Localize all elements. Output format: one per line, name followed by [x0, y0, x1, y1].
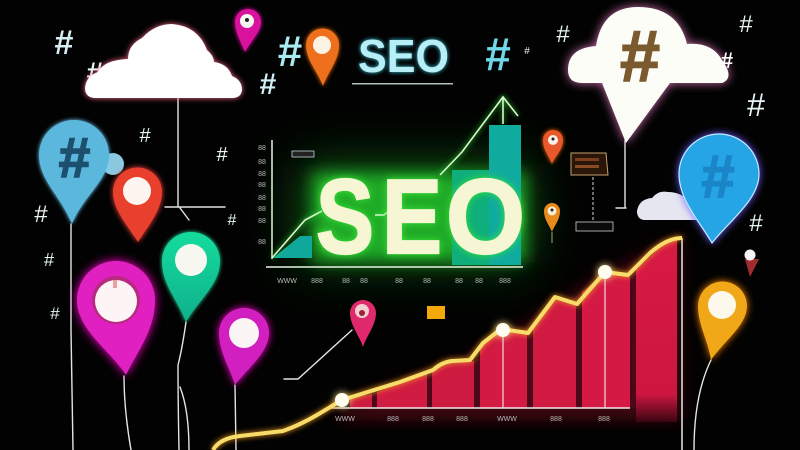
y-axis tick labels: 88 [258, 206, 266, 213]
bar labels [335, 416, 610, 423]
chart baseline and right axis [328, 238, 682, 450]
chart glow [300, 165, 528, 263]
x-axis labels: 88 [395, 278, 403, 285]
pin: large magenta [77, 261, 155, 375]
pin: blue right with hashtag: # [701, 143, 735, 210]
hashtag cluster: left and top: # [216, 144, 228, 166]
y-axis tick labels: 88 [258, 145, 266, 152]
connector strings [71, 98, 711, 450]
hashtag cluster: left and top: # [278, 27, 302, 76]
cloud pin: right with hashtag [568, 7, 733, 143]
hashtag cluster: right: # [747, 87, 765, 123]
bar labels: 888 [422, 416, 434, 423]
big SEO wordmark: O [446, 158, 525, 276]
pin: blue right with hashtag [679, 134, 759, 243]
red glow [340, 238, 680, 420]
pin: small amber with stem [544, 203, 560, 243]
glowing data points [335, 265, 612, 407]
hashtag cluster: left and top: # [44, 250, 54, 270]
cloud pin: right with hashtag: # [721, 48, 733, 73]
big SEO wordmark: E [382, 158, 442, 276]
x-axis labels: 88 [360, 278, 368, 285]
y-axis tick labels: 88 [258, 159, 266, 166]
teal bars [273, 125, 521, 265]
pin: blue left with hashtag: # [59, 126, 90, 190]
pin: small pink [350, 300, 376, 347]
bar labels: WWW [335, 416, 355, 423]
growth bar chart [213, 238, 682, 450]
hashtag cluster: left and top: # [87, 57, 104, 90]
hashtag cluster: left and top: # [55, 24, 74, 62]
x-axis labels: 88 [423, 278, 431, 285]
big SEO wordmark [316, 158, 525, 276]
axes [266, 140, 523, 267]
callout box with dashed link [571, 153, 613, 231]
bar labels: 888 [387, 416, 399, 423]
yellow growth curve [213, 238, 682, 450]
small cloud behind blue pin [637, 192, 700, 220]
red bars [350, 240, 677, 422]
pin: orange middle [543, 130, 563, 164]
pin: yellow [698, 282, 747, 360]
y-axis tick labels: 88 [258, 171, 266, 178]
pin: top magenta [235, 9, 261, 52]
y-axis tick labels: 88 [258, 218, 266, 225]
big SEO wordmark: S [316, 158, 374, 276]
blob behind blue pin [102, 153, 124, 175]
hashtag cluster: right: # [524, 46, 530, 57]
hashtag cluster: left and top: # [139, 125, 151, 147]
rising trend arrow [272, 97, 518, 258]
drop lines [503, 272, 605, 408]
cloud: left [85, 24, 242, 98]
bar labels: WWW [497, 416, 517, 423]
bar labels: 888 [456, 416, 468, 423]
cloud pin: right with hashtag: # [620, 17, 660, 97]
hashtag cluster: right [485, 11, 765, 237]
bar labels: 888 [598, 416, 610, 423]
hashtag cluster: left and top: # [228, 212, 237, 229]
bar labels: 888 [550, 416, 562, 423]
hashtag cluster: right: # [556, 21, 570, 48]
hashtag cluster: right: # [739, 11, 753, 38]
hashtag cluster: left and top: # [34, 201, 48, 228]
pin: magenta lower [219, 308, 269, 385]
x-axis labels: WWW [277, 278, 297, 285]
title: SEO heading: SEO [358, 30, 449, 82]
hashtag cluster: left and top [34, 24, 302, 323]
pin: blue left with hashtag [39, 120, 109, 224]
x-axis labels: 888 [499, 278, 511, 285]
orange square marker [427, 306, 445, 319]
hashtag cluster: right: # [749, 210, 763, 237]
hashtag cluster: right: # [485, 28, 511, 80]
x-axis labels: 88 [455, 278, 463, 285]
dark gaps between bars [372, 270, 636, 408]
hashtag cluster: left and top: # [260, 68, 277, 101]
pin: green [162, 232, 220, 322]
pin: red [113, 168, 162, 242]
y-axis tick labels: 88 [258, 182, 266, 189]
hashtag cluster: left and top: # [50, 304, 60, 323]
y-axis tick labels [258, 145, 266, 246]
x-axis labels [277, 278, 511, 285]
x-axis labels: 88 [342, 278, 350, 285]
pin: top orange [306, 28, 339, 86]
central chart [258, 97, 528, 285]
chart legend [292, 151, 314, 157]
icon: small dark red marker [744, 250, 759, 277]
y-axis tick labels: 88 [258, 239, 266, 246]
y-axis tick labels: 88 [258, 195, 266, 202]
x-axis labels: 88 [475, 278, 483, 285]
x-axis labels: 888 [311, 278, 323, 285]
